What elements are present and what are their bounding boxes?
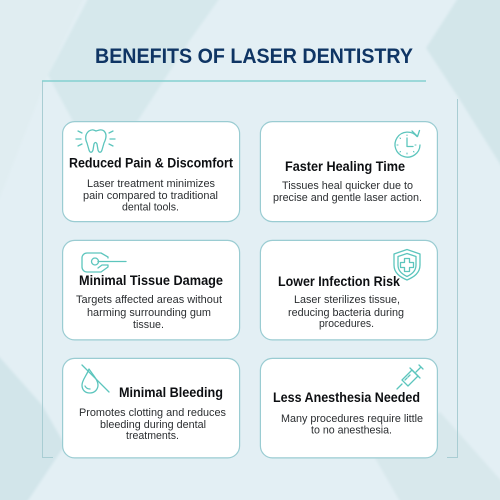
panel: reduced pain (63, 122, 240, 222)
text block: dental tools. (122, 202, 179, 214)
text block: pain compared to traditional (83, 190, 218, 202)
heading: Faster Healing Time (285, 159, 405, 174)
text block: to no anesthesia. (311, 424, 392, 436)
heading: Minimal Bleeding (119, 385, 223, 400)
text block: tissue. (133, 319, 164, 331)
icon: tooth (76, 130, 115, 152)
text block: Targets affected areas without (76, 294, 222, 306)
text block (83, 178, 218, 214)
text block: Laser sterilizes tissue, (294, 294, 400, 306)
icon: crossed blood drop (82, 365, 109, 393)
heading: Reduced Pain & Discomfort (69, 156, 233, 170)
text block: Laser treatment minimizes (87, 178, 216, 190)
text block: Promotes clotting and reduces (79, 407, 227, 419)
frame (42, 81, 458, 458)
text block: reducing bacteria during (288, 307, 404, 319)
icon: shield (394, 250, 420, 280)
panel: less anesthesia (260, 358, 437, 458)
text block: harming surrounding gum (87, 307, 211, 319)
text block: treatments. (126, 430, 179, 442)
text block: precise and gentle laser action. (273, 192, 422, 204)
icon: laser handpiece (82, 253, 126, 272)
text block (76, 294, 222, 331)
icon: syringe (397, 365, 423, 389)
text block: procedures. (319, 318, 374, 330)
text block: bleeding during dental (100, 419, 206, 431)
text block (281, 413, 423, 436)
text block: Many procedures require little (281, 413, 423, 425)
panel: minimal bleeding (63, 358, 240, 458)
text block (79, 407, 227, 442)
panel: faster healing (260, 122, 437, 222)
panel: lower infection risk (260, 240, 437, 340)
heading: Lower Infection Risk (278, 274, 400, 289)
heading: Minimal Tissue Damage (79, 273, 223, 288)
panel: minimal tissue damage (63, 240, 240, 340)
text block: Tissues heal quicker due to (282, 180, 413, 192)
text block (288, 294, 404, 330)
heading: Less Anesthesia Needed (273, 390, 420, 405)
title: BENEFITS OF LASER DENTISTRY (95, 44, 413, 68)
icon: clock (395, 130, 420, 157)
text block (273, 180, 422, 204)
